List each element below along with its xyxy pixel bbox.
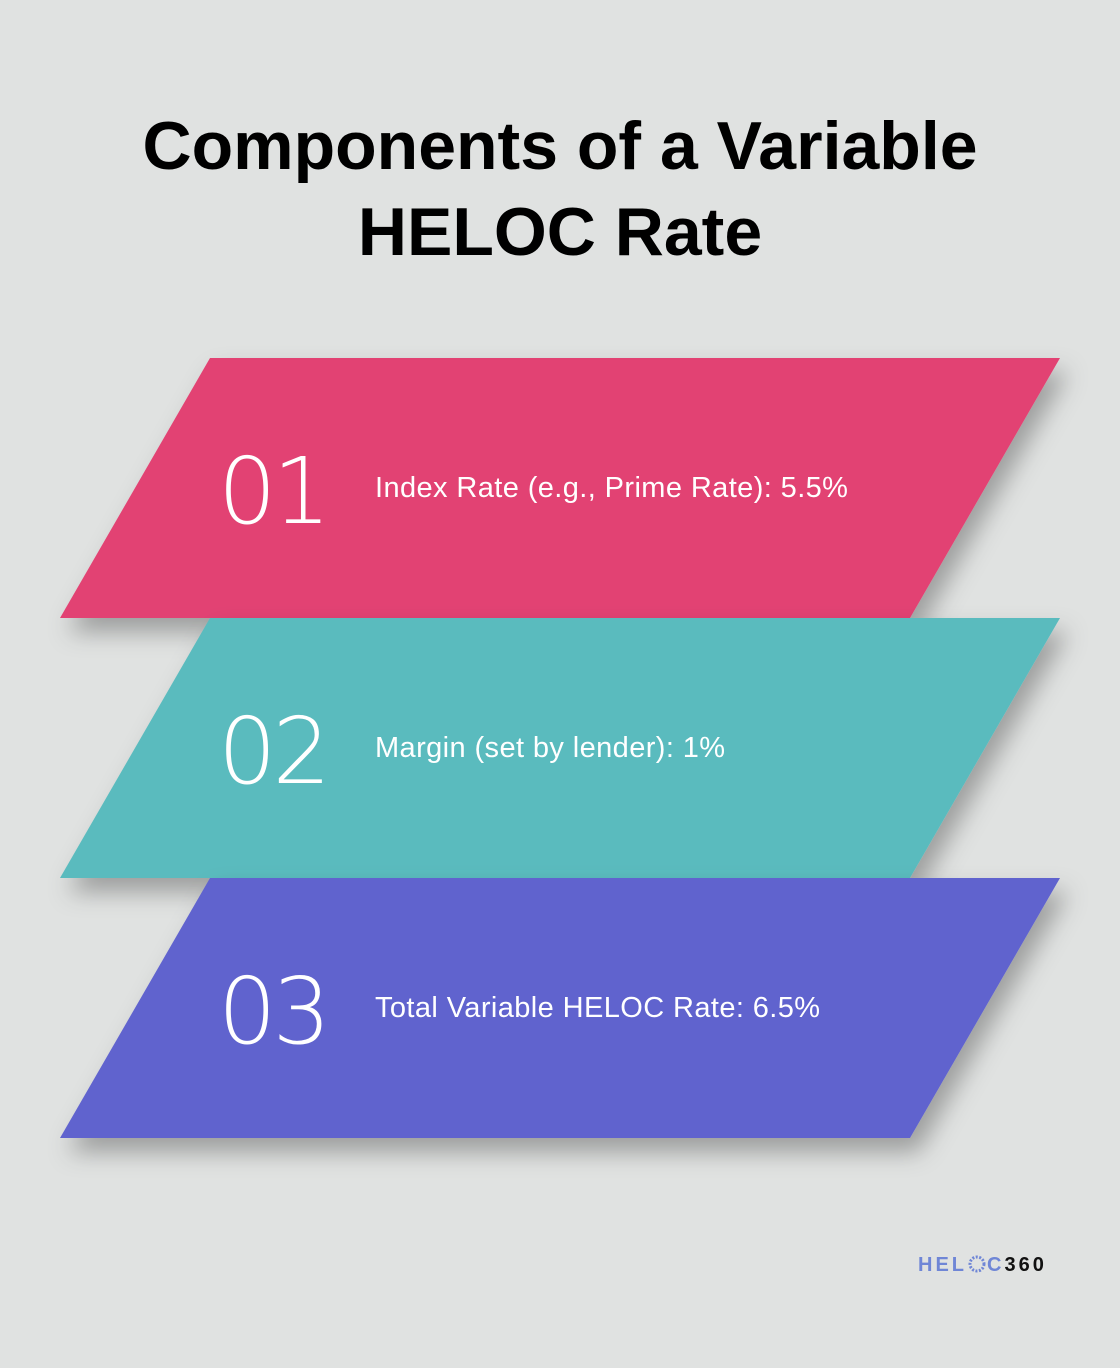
logo: HEL C360 <box>918 1254 1047 1276</box>
band 02 <box>60 618 1073 906</box>
band 03 <box>60 878 1073 1166</box>
number 02: 02 <box>218 698 327 805</box>
band 01 <box>60 358 1073 646</box>
number 01: 01 <box>218 438 327 545</box>
title: Components of a Variable <box>142 108 978 184</box>
text 02: Margin (set by lender): 1% <box>375 732 725 764</box>
text 03: Total Variable HELOC Rate: 6.5% <box>375 992 820 1024</box>
number 03: 03 <box>218 958 327 1065</box>
title: HELOC Rate <box>358 194 762 270</box>
text 01: Index Rate (e.g., Prime Rate): 5.5% <box>375 472 848 504</box>
title <box>142 108 978 270</box>
